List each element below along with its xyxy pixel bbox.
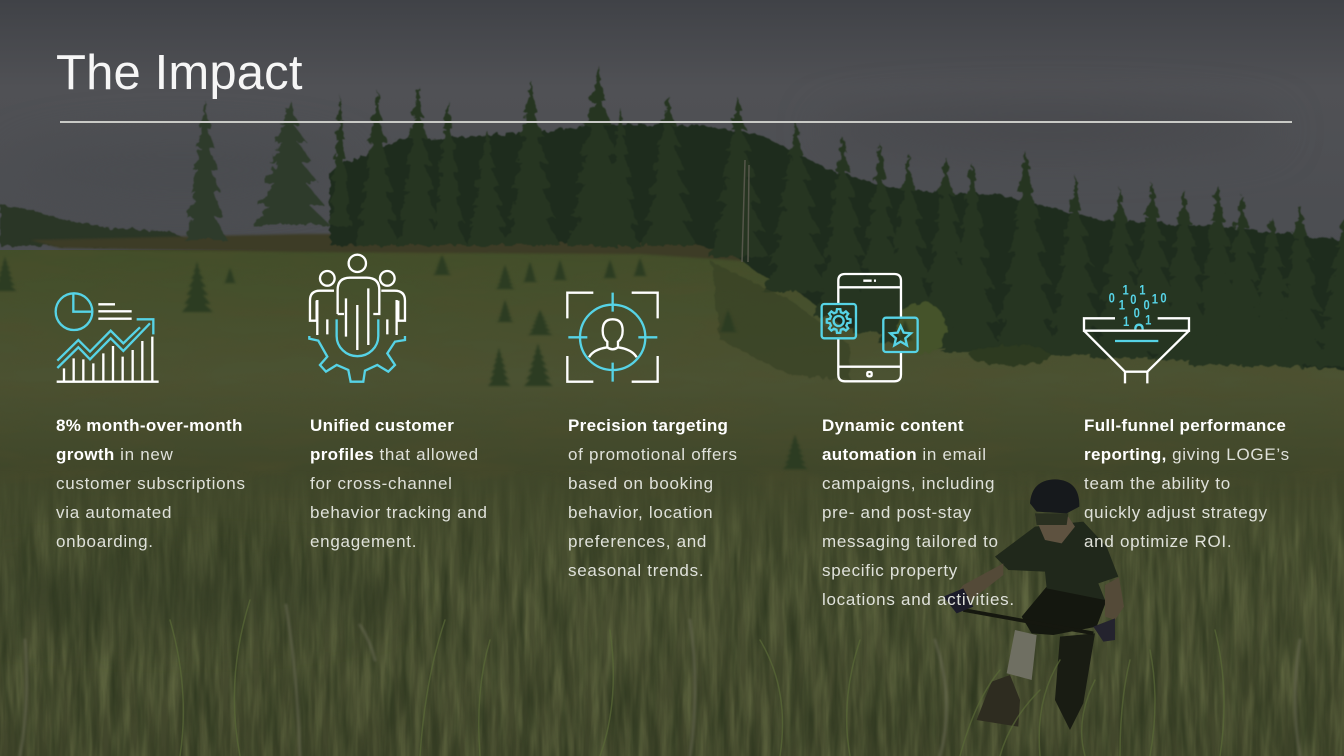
text: targeting: Precision targeting: [568, 416, 728, 435]
icon: phone with apps: [822, 274, 918, 381]
text: automation: messaging tailored to: [822, 532, 999, 551]
dark grass patch: [0, 563, 400, 627]
text: automation: pre- and post-stay: [822, 503, 972, 522]
text: growth: onboarding.: [56, 532, 154, 551]
icon: data funnel: 1: [1122, 282, 1129, 298]
text: targeting: of promotional offers: [568, 445, 738, 464]
text: growth: customer subscriptions: [56, 474, 246, 493]
meadow saplings: [0, 255, 913, 469]
icon: data funnel: 1: [1145, 312, 1151, 328]
icon: growth chart: [56, 293, 159, 382]
text: reporting: [1084, 416, 1290, 551]
text: targeting: [568, 416, 738, 580]
icon: data funnel: 0: [1109, 291, 1115, 306]
text: growth: 8% month-over-month: [56, 416, 243, 435]
text: growth: growth in new: [56, 445, 174, 464]
icon: data funnel: 1: [1152, 291, 1158, 307]
text: profiles: behavior tracking and: [310, 503, 488, 522]
text: reporting: Full-funnel performance: [1084, 416, 1286, 435]
icon: data funnel: 1: [1139, 282, 1146, 298]
icon: data funnel: 0: [1130, 292, 1136, 307]
icon: data funnel: 1: [1123, 314, 1129, 329]
icon: data funnel: 1: [1119, 297, 1125, 313]
clouds: [10, 108, 1280, 200]
forest mass: [184, 65, 1344, 370]
text: automation: automation in email: [822, 445, 987, 464]
text: reporting: and optimize ROI.: [1084, 532, 1232, 551]
title: The Impact: [56, 46, 303, 100]
text: profiles: Unified customer: [310, 416, 454, 435]
text: automation: specific property: [822, 561, 958, 580]
text: reporting: team the ability to: [1084, 474, 1231, 493]
cyclist: [943, 479, 1124, 730]
icon: data funnel: 0: [1144, 297, 1150, 313]
text: profiles: [310, 416, 488, 551]
grass texture: [1, 507, 1344, 756]
text: targeting: behavior, location: [568, 503, 713, 522]
icon: data funnel: 0: [1160, 290, 1167, 306]
icon: data funnel: [1084, 282, 1189, 383]
text: profiles: engagement.: [310, 532, 417, 551]
text: automation: campaigns, including: [822, 474, 995, 493]
icon: data funnel: 0: [1134, 306, 1140, 321]
text: targeting: seasonal trends.: [568, 561, 704, 580]
brown shrub band: [30, 234, 760, 262]
text: reporting: reporting, giving LOGE’s: [1084, 445, 1290, 464]
text: automation: [822, 416, 1015, 609]
distant tree line: [0, 205, 200, 246]
icon: target customer: [567, 293, 658, 382]
slope shrubs: [712, 262, 1050, 380]
dead trunk: [742, 160, 749, 262]
meadow mottling: [0, 250, 1344, 500]
text: profiles: profiles that allowed: [310, 445, 479, 464]
text: automation: Dynamic content: [822, 416, 964, 435]
text: targeting: preferences, and: [568, 532, 707, 551]
foreground grass blades: [20, 600, 1300, 756]
icon: team with gear: [309, 255, 405, 382]
text: growth: [56, 416, 246, 551]
text: targeting: based on booking: [568, 474, 714, 493]
text: reporting: quickly adjust strategy: [1084, 503, 1268, 522]
text: growth: via automated: [56, 503, 172, 522]
text: profiles: for cross-channel: [310, 474, 453, 493]
text: automation: locations and activities.: [822, 590, 1015, 609]
